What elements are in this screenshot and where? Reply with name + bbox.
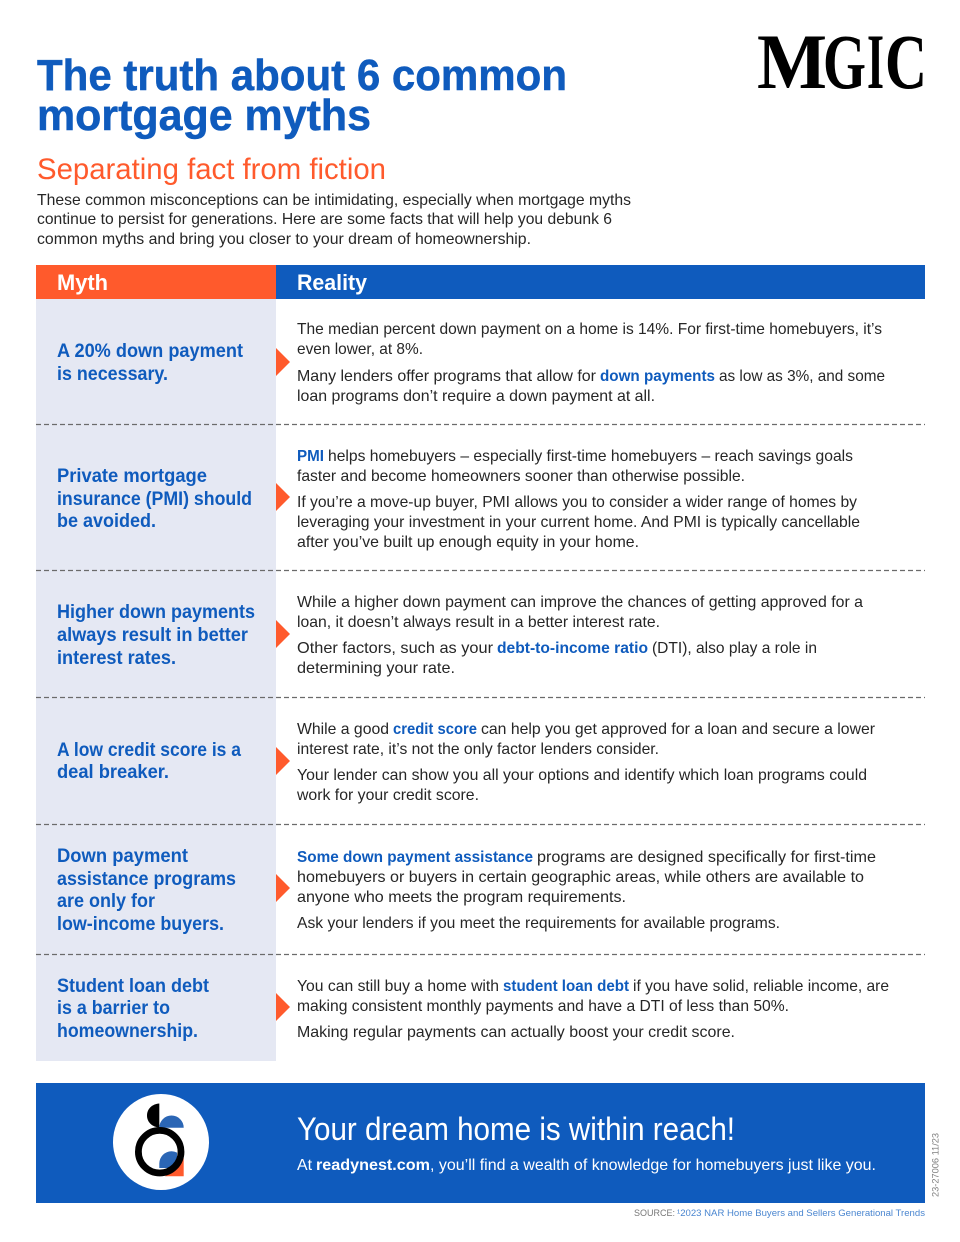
reality 2: faster and become homeowners sooner than otherwise possible.	[297, 468, 745, 485]
myth 3	[57, 602, 255, 669]
arrow 5	[276, 874, 290, 902]
reality 3: loan, it doesn’t always result in a better interest rate.	[297, 614, 660, 631]
myth 6: Student loan debt	[57, 976, 210, 997]
reality 5	[297, 849, 876, 932]
reality 3: While a higher down payment can improve the chances of getting approved for a	[297, 594, 863, 611]
reality 1: even lower, at 8%.	[297, 341, 423, 358]
logo: MGIC	[757, 18, 927, 105]
table header: Reality	[276, 265, 925, 299]
reality 6: making consistent monthly payments and have a DTI of less than 50%.	[297, 998, 789, 1015]
myth 2	[57, 466, 252, 532]
table header: Myth	[36, 265, 276, 299]
reality 4: Your lender can show you all your options and identify which loan programs could	[297, 767, 867, 784]
intro text	[37, 192, 631, 248]
reality 1: as low as 3%, and some	[719, 368, 885, 385]
table header: Reality: Reality	[297, 270, 368, 295]
table header: Myth: Myth	[57, 270, 108, 295]
reality 5: Some down payment assistance	[297, 849, 533, 866]
reality 6: if you have solid, reliable income, are	[633, 978, 889, 995]
title: The truth about 6 common	[37, 51, 567, 100]
reality 4: can help you get approved for a loan and secure a lower	[481, 721, 876, 738]
reality 1: down payments	[600, 368, 715, 385]
banner text: readynest.com	[316, 1157, 430, 1174]
myth 3: interest rates.	[57, 648, 176, 669]
myth 2: Private mortgage	[57, 466, 207, 487]
reality 5: Ask your lenders if you meet the requirements for available programs.	[297, 915, 780, 932]
arrow 2	[276, 483, 290, 511]
title: mortgage myths	[37, 91, 371, 140]
reality 5: programs are designed specifically for first-time	[537, 849, 876, 866]
reality 5: homebuyers or buyers in certain geographic areas, while others are available to	[297, 869, 864, 886]
logo: MGIC: I	[867, 18, 884, 105]
arrow 6	[276, 993, 290, 1021]
reality 2: leveraging your investment in your current home. And PMI is typically cancellable	[297, 514, 860, 531]
reality 5: anyone who meets the program requirements.	[297, 889, 626, 906]
subtitle: Separating fact from fiction	[37, 153, 386, 186]
myth 4: deal breaker.	[57, 762, 169, 783]
arrow 3	[276, 620, 290, 648]
myth 6	[57, 976, 210, 1042]
myth 2: insurance (PMI) should	[57, 489, 252, 510]
title	[37, 51, 567, 140]
myth 5: low-income buyers.	[57, 914, 224, 935]
myth 5: assistance programs	[57, 869, 236, 890]
reality 2: helps homebuyers – especially first-time homebuyers – reach savings goals	[328, 448, 853, 465]
intro text: common myths and bring you closer to your dream of homeownership.	[37, 231, 531, 248]
icon: readynest logo	[113, 1094, 209, 1190]
intro text: continue to persist for generations. Here are some facts that will help you debunk 6	[37, 211, 612, 228]
myth 4	[57, 740, 241, 783]
reality 1	[297, 321, 885, 405]
myth 3: always result in better	[57, 625, 249, 646]
reality 1: loan programs don’t require a down payment at all.	[297, 388, 655, 405]
myth 6: is a barrier to	[57, 998, 170, 1019]
myth 5	[57, 846, 236, 935]
reality 2	[297, 448, 860, 551]
reality 3	[297, 594, 863, 677]
reality 2: after you’ve built up enough equity in your home.	[297, 534, 639, 551]
myth column background	[36, 299, 276, 1061]
source note: ¹2023 NAR Home Buyers and Sellers Generational Trends	[677, 1208, 925, 1219]
logo: MGIC: C	[885, 18, 927, 105]
banner text: At	[297, 1157, 313, 1174]
myth 1: is necessary.	[57, 364, 168, 385]
myth 5: Down payment	[57, 846, 189, 867]
footer banner	[36, 1083, 925, 1203]
reality 6: Making regular payments can actually boost your credit score.	[297, 1024, 735, 1041]
logo: MGIC: M	[757, 18, 827, 105]
banner heading: Your dream home is within reach!	[297, 1111, 735, 1147]
source note: SOURCE:	[634, 1208, 675, 1219]
reality 4: interest rate, it’s not the only factor lenders consider.	[297, 741, 659, 758]
reality 6	[297, 978, 889, 1041]
reality 1: Many lenders offer programs that allow for	[297, 368, 597, 385]
reality 4: credit score	[393, 721, 477, 738]
reality 3: (DTI), also play a role in	[652, 640, 817, 657]
logo: MGIC: G	[823, 18, 866, 105]
reality 1: The median percent down payment on a home is 14%. For first-time homebuyers, it’s	[297, 321, 882, 338]
myth 3: Higher down payments	[57, 602, 255, 623]
intro text: These common misconceptions can be intimidating, especially when mortgage myths	[37, 192, 631, 209]
document code: 23-27006 11/23	[930, 1133, 942, 1197]
reality 2: If you’re a move-up buyer, PMI allows you to consider a wider range of homes by	[297, 494, 857, 511]
arrow 4	[276, 747, 290, 775]
myth 2: be avoided.	[57, 511, 156, 532]
myth 1	[57, 341, 244, 385]
arrow 1	[276, 348, 290, 376]
reality 3: debt-to-income ratio	[497, 640, 648, 657]
myth 5: are only for	[57, 891, 156, 912]
reality 4: While a good	[297, 721, 389, 738]
reality 6: student loan debt	[503, 978, 630, 995]
reality 6: You can still buy a home with	[297, 978, 499, 995]
reality 3: determining your rate.	[297, 660, 455, 677]
reality 3: Other factors, such as your	[297, 640, 494, 657]
banner text: , you’ll find a wealth of knowledge for homebuyers just like you.	[430, 1157, 876, 1174]
reality 2: PMI	[297, 448, 324, 465]
myth 6: homeownership.	[57, 1021, 198, 1042]
myth 1: A 20% down payment	[57, 341, 244, 362]
reality 4: work for your credit score.	[296, 787, 479, 804]
myth 4: A low credit score is a	[57, 740, 241, 761]
reality 4	[296, 721, 876, 804]
